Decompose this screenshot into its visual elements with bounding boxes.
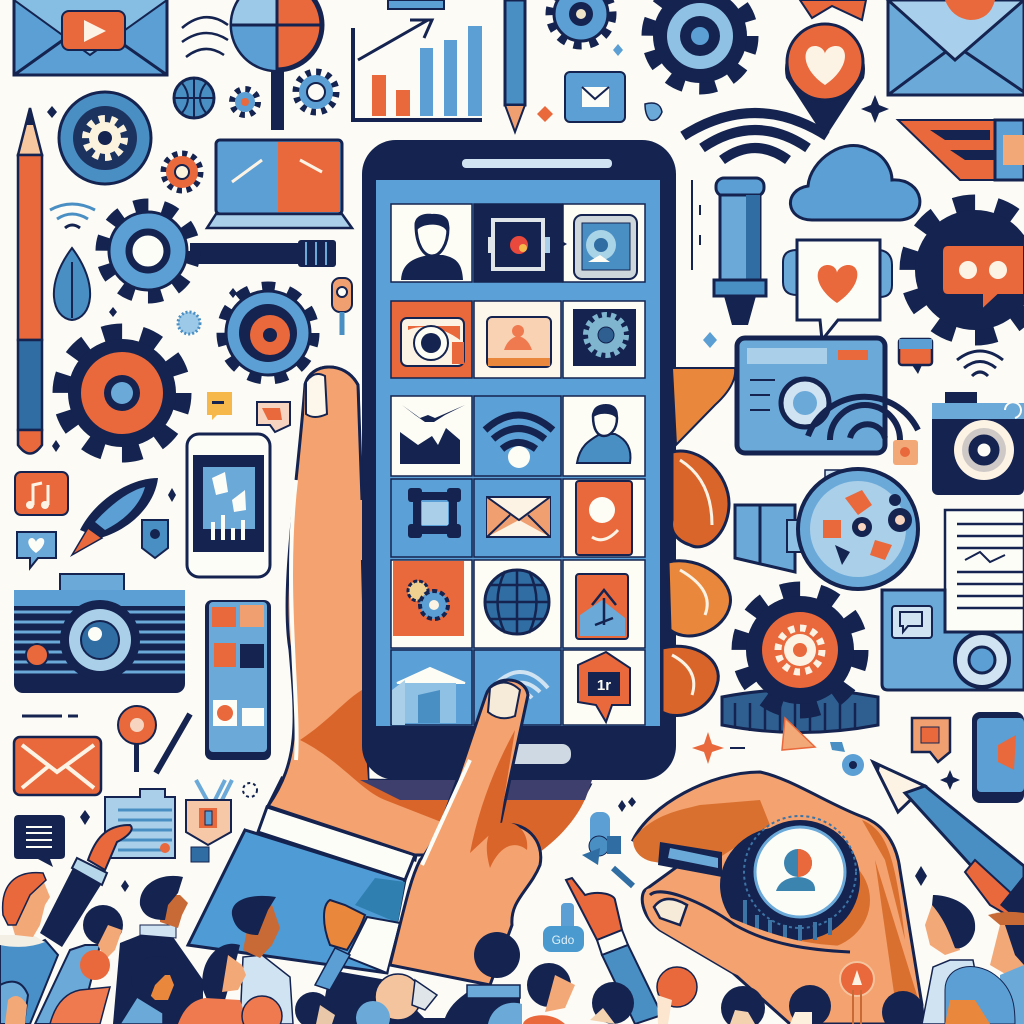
crowd: left group (0, 825, 203, 1024)
icon: mail tile (565, 72, 625, 122)
chart: growth bars (353, 0, 482, 120)
icon: heart location pin (785, 24, 865, 138)
icon: paper sheet (945, 510, 1024, 632)
icon: heart chat small (17, 532, 56, 568)
icon: large top gear (648, 0, 752, 88)
illustration: smartphone (362, 140, 676, 780)
person: front heads (590, 967, 924, 1024)
icon: small orange square (825, 440, 918, 492)
icon: heart speech bubble (783, 240, 892, 340)
icon: thin signal arcs (182, 17, 228, 57)
icon: small globe (174, 78, 214, 118)
phone screen (376, 180, 660, 726)
icon: accent shapes (618, 718, 960, 886)
icon: blue pin tag (142, 520, 168, 558)
illustration: holding hand palm (268, 367, 592, 855)
icon: small patterned dots (52, 288, 237, 452)
person: small front man (0, 956, 174, 1024)
icon: top pencil (505, 0, 525, 132)
person: woman blue hair (945, 967, 1015, 1024)
app: orange round tile (576, 481, 632, 555)
icon: tall pencil (18, 108, 42, 454)
icon: banner triangle (800, 0, 866, 20)
icon: slanted stick (156, 714, 190, 773)
person: raised hand and navy back (295, 900, 430, 1024)
app: profile card (487, 317, 551, 367)
person: red haired man with raised arm (0, 825, 132, 1024)
icon: medal (186, 780, 257, 862)
icon: big lens (735, 469, 918, 589)
person: man with brown cap (988, 912, 1024, 1024)
app: blue gear frame (574, 215, 637, 279)
icon: cloud (790, 145, 920, 220)
icon: gear with blue ring (296, 72, 336, 112)
app: mail (487, 497, 550, 537)
icon: orange gear on base (722, 590, 878, 733)
icon: right small phone (972, 712, 1024, 803)
phone speaker (462, 159, 612, 168)
person: man in light shirt (232, 896, 293, 1024)
icon: label badge: Gdo (552, 933, 575, 947)
person: woman with ponytail (523, 963, 575, 1024)
icon: short dash line (22, 714, 78, 718)
phone home button (505, 744, 571, 764)
icon: tiny gear (232, 89, 258, 115)
app: navy square frame (408, 488, 461, 538)
app: chat alert: 1r (597, 677, 611, 694)
icon: laptop (207, 140, 352, 228)
icon: vertical tube (692, 178, 766, 325)
icon: orange wing banner (898, 120, 1024, 180)
illustration: fingers on right (662, 368, 735, 716)
illustration: pointing finger and hand (390, 680, 541, 985)
icon: camera device with wifi (737, 338, 918, 453)
icon: clipboard notebook (105, 789, 175, 858)
icon: wrench fan (582, 812, 633, 886)
icon: app phone small (205, 600, 271, 760)
icon: large wifi (683, 113, 827, 160)
icon: orange envelope (14, 737, 101, 795)
person: balding group (356, 932, 522, 1024)
icon: label badge (543, 903, 584, 952)
icon: small wifi left (50, 204, 95, 228)
icon: key gear (103, 206, 336, 296)
person: woman with blue jacket (35, 905, 123, 1024)
illustration: left sleeve and cuff (188, 778, 420, 973)
icon: orange medallion pin (840, 962, 874, 1024)
dial body (720, 827, 844, 943)
icon: small top gear (550, 0, 612, 45)
icon: gear with chat bubble (908, 203, 1024, 337)
icon: device with lens (882, 590, 1024, 690)
app: envelope broken (400, 405, 465, 464)
icon: big slanted pencil (873, 762, 1024, 925)
icon: small right wifi (703, 332, 1003, 376)
app: person silhouette (401, 214, 463, 280)
app: navy gear tile (573, 309, 636, 366)
icon: small phone (187, 434, 270, 577)
person: man in blue shirt (922, 895, 985, 1024)
app grid (391, 204, 645, 725)
app: orange figure tile (576, 574, 628, 639)
icon: large orange gear (62, 333, 182, 453)
app: chat alert (578, 652, 630, 722)
icon: small accents near mail (537, 44, 889, 123)
icon: video envelope (14, 0, 167, 75)
icon: music note tile (15, 472, 68, 515)
icon: yellow and orange chat marks (207, 392, 290, 432)
crowd: right group (523, 878, 1024, 1024)
icon: navy chat (14, 810, 129, 892)
illustration: right hand holding dial (633, 772, 922, 1024)
person: man in navy suit (113, 876, 203, 1024)
icon: small navy chat with orange (899, 339, 932, 374)
thumb (646, 888, 885, 1005)
icon: orange gear (164, 154, 200, 190)
icon: top right envelope (888, 0, 1024, 95)
app: house (392, 668, 465, 725)
dial stem (658, 842, 722, 877)
illustration: thumb (300, 367, 362, 560)
app: camera on orange (401, 318, 464, 366)
icon: rocket (72, 478, 176, 555)
app: wifi (485, 415, 553, 468)
icon: retro camera (14, 574, 185, 693)
icon: round pin (118, 706, 156, 772)
icon: blue orange gear (222, 287, 314, 379)
app: person in blue (577, 404, 630, 463)
icon: round badge gear (47, 92, 151, 184)
crowd: center group (178, 896, 522, 1024)
app: globe (485, 570, 549, 634)
app: gears on orange (393, 561, 464, 636)
app: wifi faded (490, 672, 548, 700)
icon: leaf (54, 248, 90, 320)
icon: right camera (932, 392, 1024, 495)
app: framed photo (488, 220, 567, 269)
icon: orange chat tile (912, 718, 950, 762)
icon: small pin tag (332, 278, 352, 335)
person: pointing arm (566, 878, 662, 1024)
icon: magnifier (232, 0, 322, 130)
person: woman with bob (178, 944, 282, 1024)
